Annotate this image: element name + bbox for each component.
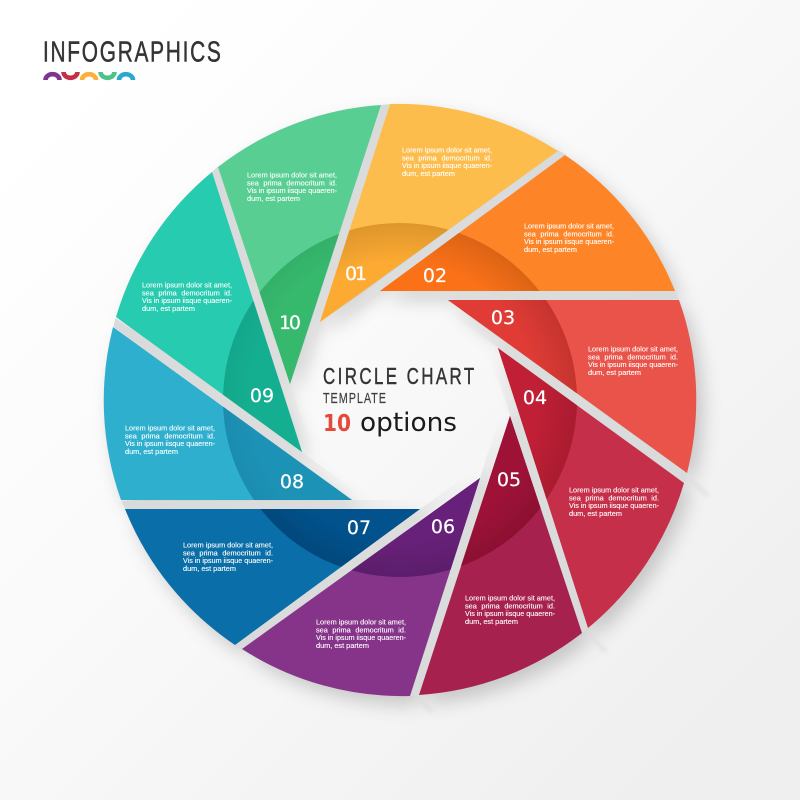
segment 09 text: sea prima democritum id. (142, 288, 232, 297)
segment 08 text: Lorem ipsum dolor sit amet, (125, 424, 215, 432)
segment 04 text: Lorem ipsum dolor sit amet, (569, 486, 659, 494)
panel: segment 01 (320, 104, 558, 322)
segment 04 text (569, 486, 660, 518)
segment 02 text: dum, est partem (524, 245, 577, 254)
segment 01 text: Lorem ipsum dolor sit amet, (402, 146, 492, 154)
segment 08 text: dum, est partem (125, 447, 178, 456)
segment 01 number: 01 (345, 263, 367, 285)
segment 10 text (247, 170, 338, 203)
segment 08 text: sea prima democritum id. (125, 431, 215, 440)
segment 07 text: sea prima democritum id. (183, 548, 273, 557)
segment 08 text (125, 424, 216, 456)
segment 02 text: sea prima democritum id. (524, 229, 614, 238)
segment 07 text: dum, est partem (183, 564, 236, 573)
panel: segment 08 (104, 327, 352, 500)
segment 10 text: dum, est partem (247, 194, 300, 203)
segment 04 text: dum, est partem (569, 509, 622, 518)
segment 03 text: Vis in ipsum iisque quaeren- (588, 360, 679, 369)
shadow tails past the rim (415, 478, 708, 712)
segment 06 text: dum, est partem (316, 641, 369, 650)
segment 07 number: 07 (347, 517, 371, 539)
segment 02 text: Lorem ipsum dolor sit amet, (524, 222, 614, 230)
soft drop shadow of the wheel (111, 113, 703, 705)
segment 07 text (183, 540, 274, 573)
panel: segment 09 (116, 172, 302, 452)
segment 10 text: Lorem ipsum dolor sit amet, (247, 170, 337, 180)
segment 07 text: Lorem ipsum dolor sit amet, (183, 540, 273, 550)
segment 10 number: 10 (279, 312, 301, 334)
segment 03 text (588, 344, 679, 377)
segment 06 text: Vis in ipsum iisque quaeren- (316, 633, 407, 642)
segment 05 text: sea prima democritum id. (465, 601, 555, 610)
segment 08 text: Vis in ipsum iisque quaeren- (125, 439, 216, 448)
segment 02 number: 02 (423, 265, 447, 287)
segment 03 text: sea prima democritum id. (588, 352, 678, 361)
segment 06 text: Lorem ipsum dolor sit amet, (316, 618, 406, 626)
callout: options word: options (360, 408, 457, 438)
segment 06 text (316, 618, 407, 650)
panel: segment 03 (448, 300, 696, 473)
segment 03 number: 03 (491, 307, 515, 329)
segment 09 text: Lorem ipsum dolor sit amet, (142, 280, 232, 290)
segment 09 number: 09 (250, 385, 274, 407)
segment 07 text: Vis in ipsum iisque quaeren- (183, 556, 274, 565)
title: INFOGRAPHICS: INFOGRAPHICS (43, 36, 221, 68)
segment 01 text: sea prima democritum id. (402, 153, 492, 162)
segment 05 text (465, 594, 556, 626)
segment 05 text: Lorem ipsum dolor sit amet, (465, 594, 555, 602)
panel: segment 05 (419, 416, 582, 695)
segment 09 text: Vis in ipsum iisque quaeren- (142, 296, 233, 305)
segment 05 text: Vis in ipsum iisque quaeren- (465, 609, 556, 618)
segment 08 number: 08 (280, 471, 304, 493)
gaps between segments (85, 96, 715, 704)
segment 03 text: Lorem ipsum dolor sit amet, (588, 344, 678, 354)
segment 05 text: dum, est partem (465, 617, 518, 626)
segment 05 number: 05 (497, 469, 521, 491)
center heading (323, 363, 475, 438)
segment 03 text: dum, est partem (588, 368, 641, 377)
segment 09 text: dum, est partem (142, 304, 195, 313)
segment 04 number: 04 (523, 387, 547, 409)
heading: circle chart: CIRCLE CHART (323, 363, 475, 390)
segment 04 text: sea prima democritum id. (569, 493, 659, 502)
panel: segment 04 (498, 348, 684, 628)
segment 02 text (524, 222, 615, 254)
segment 01 text: dum, est partem (402, 169, 455, 178)
panel: segment 10 (218, 105, 381, 384)
callout: 10 options: 10 (323, 411, 351, 437)
panel: segment 02 (380, 155, 675, 291)
icon: coloured wave (46, 72, 133, 80)
segment 01 text (402, 146, 493, 178)
segment 10 text: Vis in ipsum iisque quaeren- (247, 186, 338, 195)
segment 10 text: sea prima democritum id. (247, 178, 337, 187)
panel: segment 07 (125, 509, 420, 645)
segment 01 text: Vis in ipsum iisque quaeren- (402, 161, 493, 170)
segment 02 text: Vis in ipsum iisque quaeren- (524, 237, 615, 246)
segment 06 text: sea prima democritum id. (316, 625, 406, 634)
segment 09 text (142, 280, 233, 313)
subheading: template: TEMPLATE (323, 389, 386, 406)
segment 04 text: Vis in ipsum iisque quaeren- (569, 501, 660, 510)
panel: segment 06 (242, 478, 480, 696)
segment 06 number: 06 (431, 516, 455, 538)
